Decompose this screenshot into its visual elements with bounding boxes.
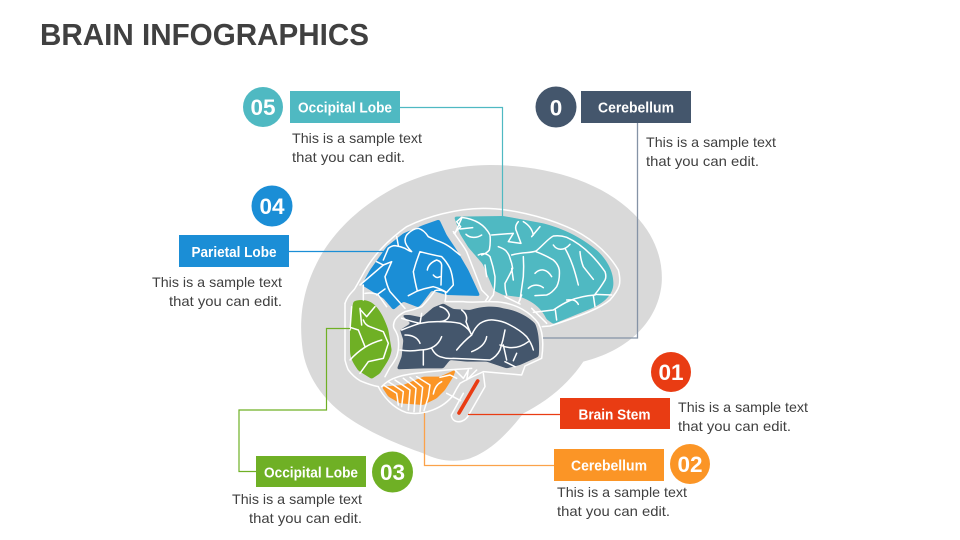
callout 03: that you can edit. [249, 510, 362, 526]
callout 04 [152, 186, 292, 309]
callout 04: 04 [259, 194, 285, 219]
callout 04: This is a sample text [152, 274, 282, 290]
blue gyri [360, 228, 460, 308]
teal lobe [454, 216, 613, 324]
blue lobe [362, 219, 480, 310]
white outlines [345, 208, 620, 422]
callout 0: This is a sample text [646, 134, 776, 150]
callout 05 [243, 87, 422, 165]
callout 02: 02 [677, 452, 703, 477]
callout 05: 05 [250, 95, 276, 120]
callout 05: This is a sample text [292, 130, 422, 146]
teal gyri [454, 217, 612, 320]
green lobe [350, 300, 392, 379]
connector: cerebellum dark [543, 123, 638, 338]
connector: occipital lobe green [239, 328, 350, 472]
callout 02: that you can edit. [557, 503, 670, 519]
connector: parietal lobe [289, 250, 385, 252]
callout 05: Occipital Lobe [298, 100, 392, 116]
callout 01: 01 [658, 360, 684, 385]
callout 03 [232, 452, 413, 526]
title: BRAIN INFOGRAPHICS [40, 17, 369, 52]
callout 01 [560, 352, 808, 434]
connector: brain stem [468, 414, 560, 416]
brain lobes [350, 216, 613, 405]
callout 01: This is a sample text [678, 399, 808, 415]
callout 01: Brain Stem [578, 408, 650, 424]
cerebellum folds [383, 370, 477, 412]
green gyri [350, 307, 388, 373]
callout 0 [536, 86, 776, 169]
callout 05: that you can edit. [292, 149, 405, 165]
callout 0: Cerebellum [598, 100, 674, 116]
brain illustration [301, 165, 662, 461]
callout 02 [554, 444, 710, 519]
callout 02: This is a sample text [557, 484, 687, 500]
brain stem [459, 381, 478, 413]
callout 0: that you can edit. [646, 153, 759, 169]
orange cerebellum [382, 369, 456, 405]
connector: occipital lobe teal [400, 108, 502, 217]
callout 04: Parietal Lobe [192, 245, 276, 261]
connector: cerebellum orange [424, 413, 554, 466]
callout 0: 0 [550, 96, 562, 120]
head silhouette [301, 165, 662, 461]
callout 03: This is a sample text [232, 491, 362, 507]
callout 01: that you can edit. [678, 418, 791, 434]
callout 04: that you can edit. [169, 293, 282, 309]
callout 03: Occipital Lobe [264, 466, 358, 482]
dark lobe [397, 303, 539, 369]
dark gyri [400, 307, 533, 367]
callout 03: 03 [380, 460, 405, 485]
callout 02: Cerebellum [571, 458, 647, 474]
